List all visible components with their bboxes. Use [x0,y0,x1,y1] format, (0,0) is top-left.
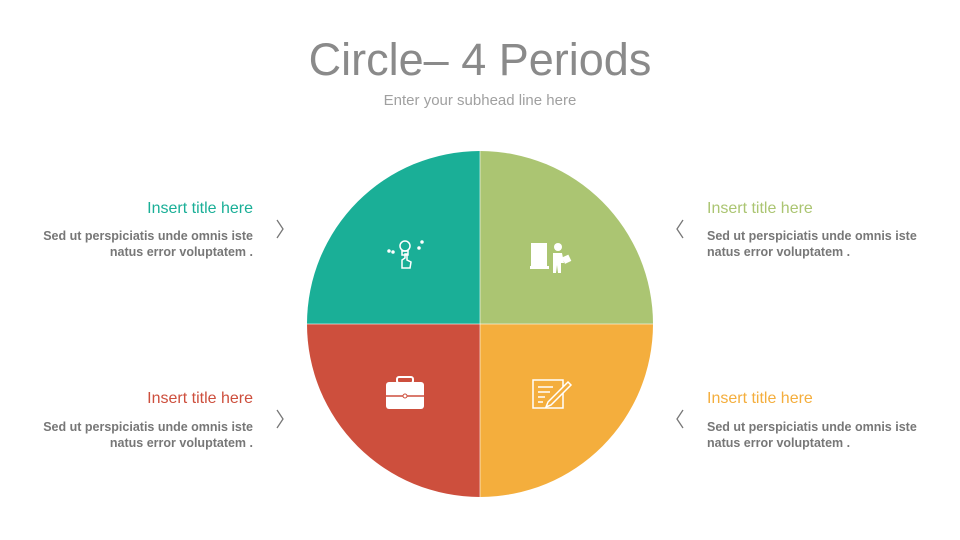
text block: bottom-left [43,390,253,450]
text: Sed ut perspiciatis unde omnis iste natus error voluptatem . [707,229,917,259]
text: Sed ut perspiciatis unde omnis iste natus error voluptatem . [707,420,917,450]
text block: top-right [707,200,917,259]
icon: building and person [530,243,571,273]
text: Insert title here [707,200,813,217]
text: Insert title here [707,390,813,407]
text: Insert title here [147,200,253,217]
arrow: left bottom [277,410,283,428]
arrow: left top [277,220,283,238]
icon: briefcase [386,377,424,409]
text: Insert title here [147,390,253,407]
title: Circle– 4 Periods [309,34,651,85]
text: Sed ut perspiciatis unde omnis iste natus error voluptatem . [43,229,253,259]
text: Sed ut perspiciatis unde omnis iste natus error voluptatem . [43,420,253,450]
arrow: right top [677,220,683,238]
icon: document with pen [533,380,571,408]
arrow: right bottom [677,410,683,428]
icon: idea [388,241,423,268]
subhead: Enter your subhead line here [384,92,576,109]
text block: bottom-right [707,390,917,450]
text block: top-left [43,200,253,259]
